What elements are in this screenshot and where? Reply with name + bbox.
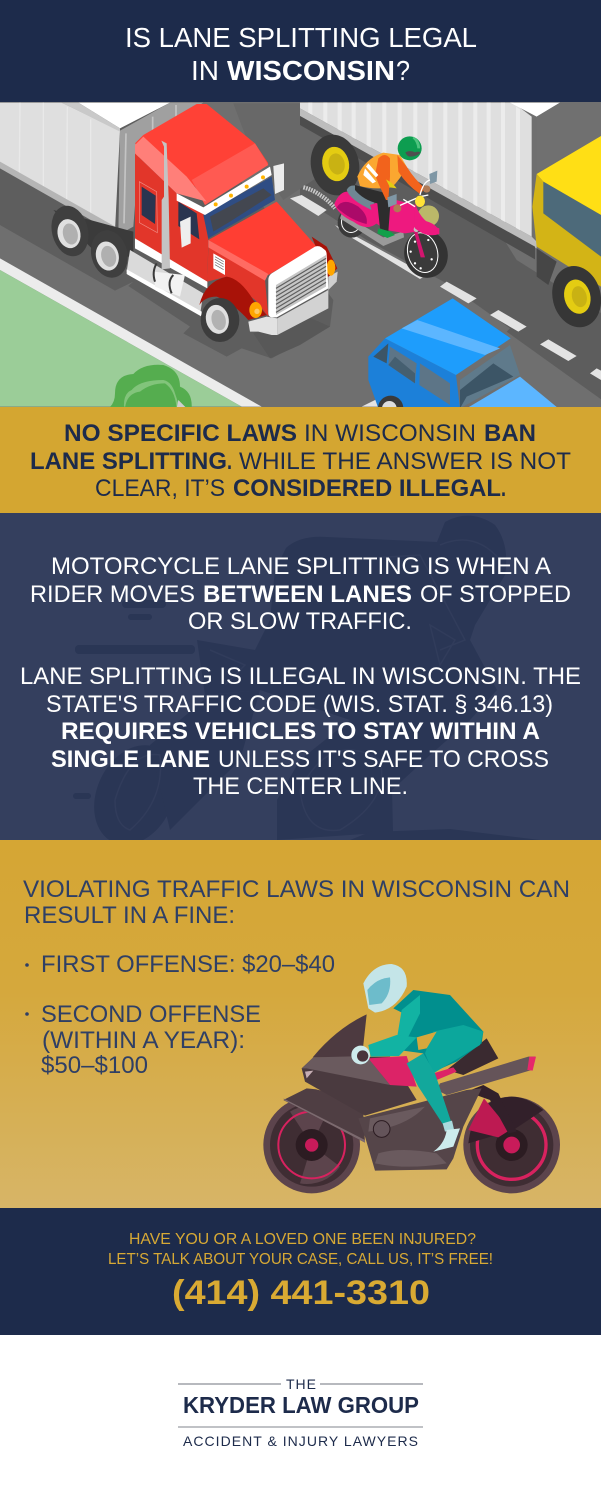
call to action text: HAVE YOU OR A LOVED ONE BEEN INJURED? <box>129 1231 476 1248</box>
callout: no specific laws: WHILE THE ANSWER IS NOT <box>239 448 571 475</box>
hands and mirrors <box>393 204 401 212</box>
callout: no specific laws: IN WISCONSIN <box>304 420 476 447</box>
seat <box>347 186 375 210</box>
call to action panel <box>0 1208 601 1335</box>
rear fairing <box>334 191 377 227</box>
front wheel <box>404 231 448 278</box>
callout: no specific laws: LANE SPLITTING <box>30 448 227 475</box>
second truck (behind the motorcycle) <box>300 103 601 333</box>
windshield <box>313 1014 367 1057</box>
definition text: MOTORCYCLE LANE SPLITTING IS WHEN A <box>51 553 551 580</box>
callout: no specific laws <box>0 407 601 513</box>
fines list: (WITHIN A YEAR): <box>42 1027 245 1054</box>
bush <box>108 365 192 408</box>
tail <box>437 1057 535 1095</box>
definition text: OF STOPPED <box>420 581 571 608</box>
title text: IS LANE SPLITTING LEGAL <box>125 22 477 53</box>
callout: no specific laws: . <box>227 448 232 475</box>
logo: ACCIDENT & INJURY LAWYERS <box>183 1433 418 1449</box>
rear wheel <box>310 134 360 196</box>
exhaust smoke <box>303 187 335 208</box>
title text: ? <box>396 55 410 86</box>
road shading <box>0 110 601 407</box>
glove <box>351 1046 370 1064</box>
title text <box>125 22 477 86</box>
callout: no specific laws: . <box>501 475 506 502</box>
cab <box>536 102 560 117</box>
callout: no specific laws: CLEAR, IT’S <box>95 475 225 502</box>
rider <box>393 990 483 1073</box>
definition text <box>20 553 581 800</box>
seat <box>447 1038 498 1075</box>
rear wheel <box>338 214 362 238</box>
trailer wheels <box>52 206 87 256</box>
torso and vest <box>357 153 407 188</box>
panel: definition <box>0 513 601 858</box>
logo: THE <box>286 1376 316 1392</box>
exhaust pipe <box>340 213 404 246</box>
definition text: REQUIRES VEHICLES TO STAY WITHIN A <box>61 718 540 745</box>
hood <box>208 202 317 275</box>
logo: KRYDER LAW GROUP <box>183 1392 419 1418</box>
fines list: $50–$100 <box>41 1052 148 1079</box>
semi truck: red cab <box>127 104 338 358</box>
call to action text <box>108 1231 493 1268</box>
watermark motorcycle <box>73 516 540 858</box>
definition text: STATE'S TRAFFIC CODE (WIS. STAT. § 346.13) <box>46 691 553 718</box>
motorcycle rider illustration <box>263 964 560 1193</box>
title text: IN <box>191 55 219 86</box>
legs <box>355 185 391 232</box>
title banner <box>0 0 601 102</box>
lane dashes <box>290 195 601 407</box>
fines list: SECOND OFFENSE <box>41 1001 261 1028</box>
tank and front body <box>370 198 439 235</box>
headlamp <box>415 196 425 207</box>
definition text: BETWEEN LANES <box>203 581 412 608</box>
callout: no specific laws: NO SPECIFIC LAWS <box>64 420 297 447</box>
definition text: RIDER MOVES <box>30 581 195 608</box>
fines intro text <box>23 876 570 929</box>
definition text: THE CENTER LINE. <box>193 773 408 800</box>
definition text: OR SLOW TRAFFIC. <box>188 608 412 635</box>
phone number: (414) 441-3310 <box>172 1274 430 1312</box>
engine block <box>358 1088 482 1171</box>
traffic illustration <box>0 102 601 433</box>
logo <box>178 1376 423 1449</box>
motorcycle and rider <box>303 136 453 283</box>
wheels <box>263 1097 360 1193</box>
blue car <box>368 298 557 407</box>
callout: no specific laws: BAN <box>484 420 536 447</box>
swing arm <box>468 1098 510 1137</box>
nose: fender, grille, bumper <box>312 237 337 277</box>
trailer <box>300 103 532 237</box>
helmet <box>363 964 407 1013</box>
title text: WISCONSIN <box>227 55 395 86</box>
fuel tank <box>368 1056 417 1087</box>
definition text: SINGLE LANE <box>51 746 210 773</box>
panel: fines <box>0 840 601 1208</box>
fines intro text: RESULT IN A FINE: <box>24 902 235 929</box>
callout: no specific laws: CONSIDERED ILLEGAL <box>233 475 501 502</box>
definition text: UNLESS IT'S SAFE TO CROSS <box>218 746 549 773</box>
headlight glow <box>418 205 439 227</box>
fines list <box>25 951 335 1079</box>
helmet <box>398 136 422 160</box>
upper fairing <box>302 1057 417 1116</box>
fines list: FIRST OFFENSE: $20–$40 <box>41 951 335 978</box>
definition text: LANE SPLITTING IS ILLEGAL IN WISCONSIN. THE <box>20 663 581 690</box>
mudguard <box>283 1088 365 1143</box>
fines intro text: VIOLATING TRAFFIC LAWS IN WISCONSIN CAN <box>23 876 570 903</box>
front fender, wheel and light <box>199 277 267 320</box>
semi truck: trailer <box>0 103 203 282</box>
call to action text: LET’S TALK ABOUT YOUR CASE, CALL US, IT’S FREE! <box>108 1251 493 1268</box>
exhaust stack <box>161 141 170 269</box>
